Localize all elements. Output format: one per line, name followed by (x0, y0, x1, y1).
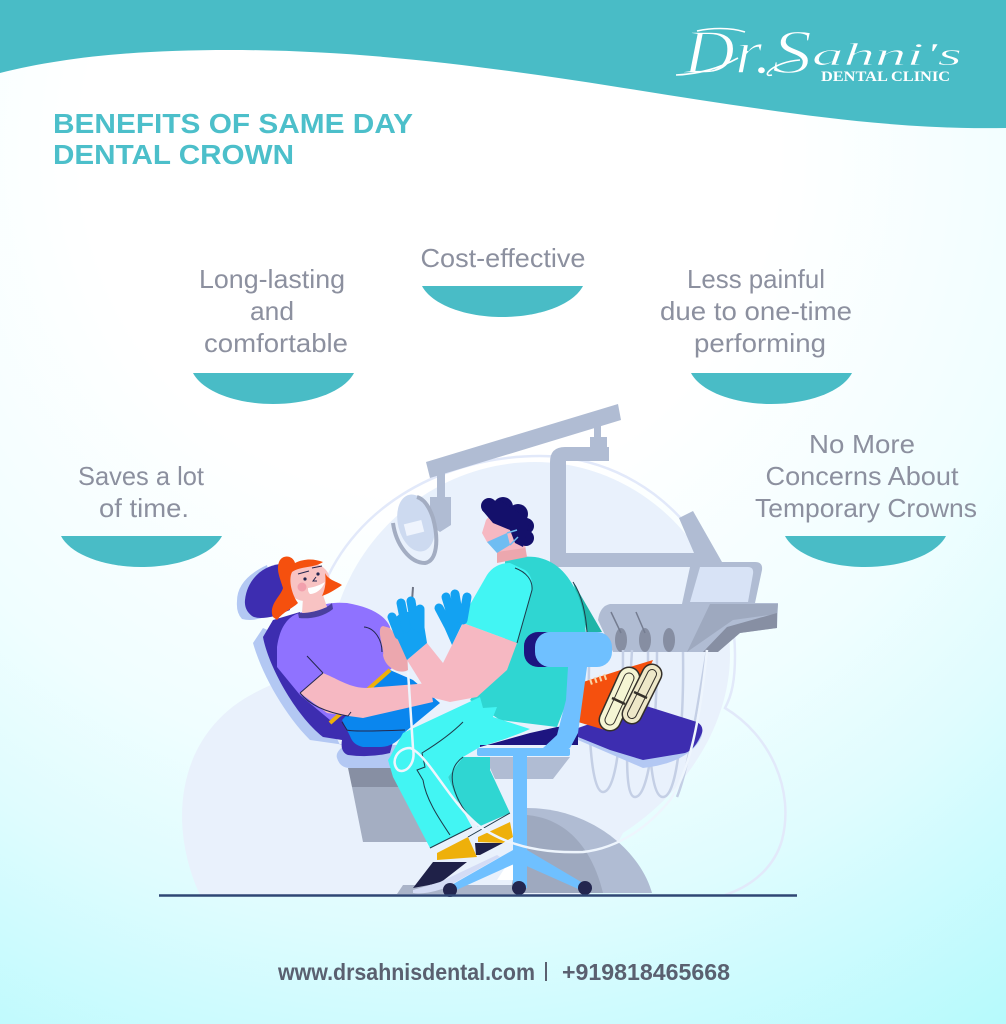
benefit: long-lasting: and (250, 296, 294, 326)
patient trousers (342, 670, 440, 747)
benefit: less painful: Less painful (687, 264, 825, 294)
title: BENEFITS OF SAME DAY (53, 108, 413, 139)
illustration: dental scene (159, 404, 797, 897)
benefit: long-lasting: Long-lasting (199, 264, 345, 294)
backdrop cloud (182, 456, 785, 895)
benefit: saves time: Saves a lot (78, 461, 205, 491)
benefit: saves time (61, 461, 222, 567)
contact footer: www.drsahnisdental.com (277, 959, 535, 985)
contact footer: +919818465668 (562, 959, 730, 985)
benefit: no more concerns (755, 429, 977, 567)
title: DENTAL CROWN (53, 139, 294, 170)
contact footer (277, 959, 730, 985)
benefit: less painful: performing (694, 328, 826, 358)
hanging cables (589, 650, 707, 797)
doctor head (481, 497, 534, 563)
benefit: less painful (660, 264, 852, 404)
instrument (411, 587, 413, 615)
header wave (0, 0, 1006, 128)
logo: Dr. (683, 19, 772, 87)
logo (676, 19, 962, 87)
logo: ahni's (812, 36, 962, 72)
white tube (395, 650, 707, 852)
doctor front trouser leg (388, 697, 530, 848)
gloves (390, 594, 468, 660)
logo: S (772, 19, 812, 87)
dental lamp (392, 404, 621, 563)
logo: DENTAL CLINIC (821, 69, 950, 85)
patient head (272, 556, 342, 620)
benefit: long-lasting: comfortable (204, 328, 348, 358)
doctor shoes and socks (413, 822, 513, 893)
footrest (578, 705, 702, 768)
doctor chair (443, 632, 612, 897)
benefit: no more concerns: Temporary Crowns (755, 493, 977, 523)
doctor back and scrubs (460, 557, 602, 727)
patient shoes (578, 660, 653, 730)
benefit: no more concerns: No More (809, 429, 915, 459)
benefit: long-lasting (193, 264, 354, 404)
doctor back trouser leg (448, 757, 510, 827)
benefit: no more concerns: Concerns About (766, 461, 959, 491)
patient body (277, 603, 433, 731)
unit arm and tray (550, 420, 778, 652)
benefit: less painful: due to one-time (660, 296, 852, 326)
patient chair (237, 564, 400, 768)
title (53, 108, 413, 170)
benefit: cost-effective: Cost-effective (420, 243, 586, 273)
benefit: cost-effective (420, 243, 586, 317)
floor arch base (397, 808, 652, 894)
floor line (159, 894, 797, 897)
doctor arm (407, 623, 517, 702)
benefit: saves time: of time. (99, 493, 189, 523)
chair pedestal (348, 757, 570, 842)
